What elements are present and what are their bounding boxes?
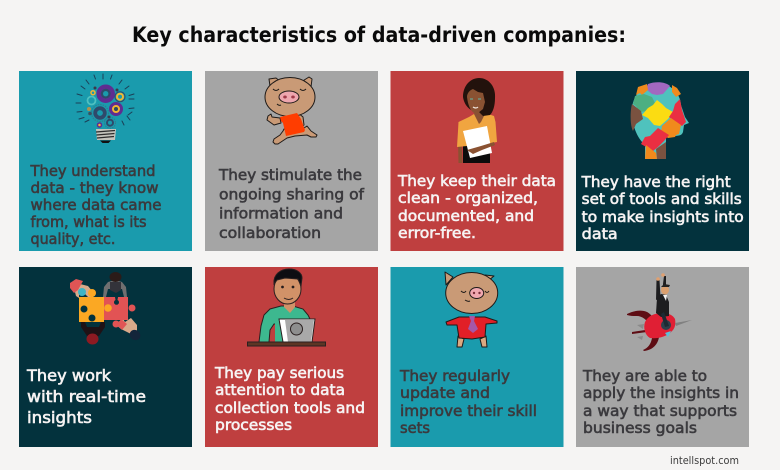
panel: tools and skills — [576, 71, 749, 251]
text: understand data: They understand — [30, 162, 155, 180]
panel: sharing and collaboration — [205, 71, 378, 251]
text: data collection — [214, 364, 365, 434]
panel: apply insights — [576, 267, 749, 447]
text: tools and skills: They have the right — [581, 173, 731, 191]
panel: understand data — [19, 71, 192, 251]
text: update skills — [399, 367, 537, 437]
text: apply insights: business goals — [583, 419, 697, 437]
text: clean data: error-free. — [398, 224, 476, 242]
icon: businessman on rocket — [627, 273, 692, 351]
text: understand data — [30, 162, 161, 248]
text: data collection: attention to data — [215, 381, 345, 399]
text: clean data: They keep their data — [397, 172, 556, 190]
text: real-time insights: They work — [26, 366, 112, 385]
panel: data collection — [205, 267, 378, 447]
title: Key characteristics of data-driven companies: — [132, 23, 626, 48]
icon: puzzle head — [631, 82, 689, 159]
text: apply insights: They are able to — [582, 367, 707, 385]
text: understand data: from, what is its — [30, 213, 147, 231]
text: clean data: clean - organized, — [398, 189, 538, 207]
icon: running pig — [265, 77, 317, 144]
text: sharing: collaboration — [219, 224, 321, 242]
panel: real-time insights — [19, 267, 192, 447]
text: data collection: They pay serious — [214, 364, 344, 382]
text: apply insights: apply the insights in — [583, 384, 739, 402]
icon: people joining puzzle pieces — [70, 272, 142, 344]
text: sharing: information and — [219, 204, 343, 222]
text: update skills: improve their skill — [400, 402, 537, 420]
text: understand data: data - they know — [30, 179, 158, 197]
text: real-time insights: insights — [27, 408, 92, 427]
text: clean data — [397, 172, 556, 242]
text: tools and skills: to make insights into — [582, 208, 744, 226]
icon: woman holding papers — [457, 78, 497, 163]
text: update skills: sets — [400, 419, 430, 437]
text: real-time insights: with real-time — [27, 387, 146, 406]
panel: clean data — [390, 71, 564, 251]
text: real-time insights — [26, 366, 146, 427]
text: sharing: ongoing sharing of — [219, 186, 365, 204]
text: tools and skills: data — [582, 225, 618, 243]
text: sharing — [218, 166, 365, 242]
text: clean data: documented, and — [398, 207, 534, 225]
source credit: intellspot.com — [670, 454, 739, 467]
text: sharing: They stimulate the — [218, 166, 362, 184]
icon: man at laptop — [248, 269, 326, 346]
text: tools and skills: set of tools and skills — [582, 190, 742, 208]
text: tools and skills — [581, 173, 744, 243]
text: apply insights: a way that supports — [583, 402, 737, 420]
icon: pig with tie — [445, 272, 498, 347]
text: apply insights — [582, 367, 739, 437]
icon: light bulb with gears — [76, 74, 134, 143]
text: update skills: update and — [400, 384, 490, 402]
text: understand data: where data came — [30, 196, 162, 214]
panel: update skills — [390, 267, 564, 447]
text: data collection: processes — [215, 416, 292, 434]
text: update skills: They regularly — [399, 367, 510, 385]
text: data collection: collection tools and — [215, 399, 365, 417]
text: understand data: quality, etc. — [30, 230, 116, 248]
